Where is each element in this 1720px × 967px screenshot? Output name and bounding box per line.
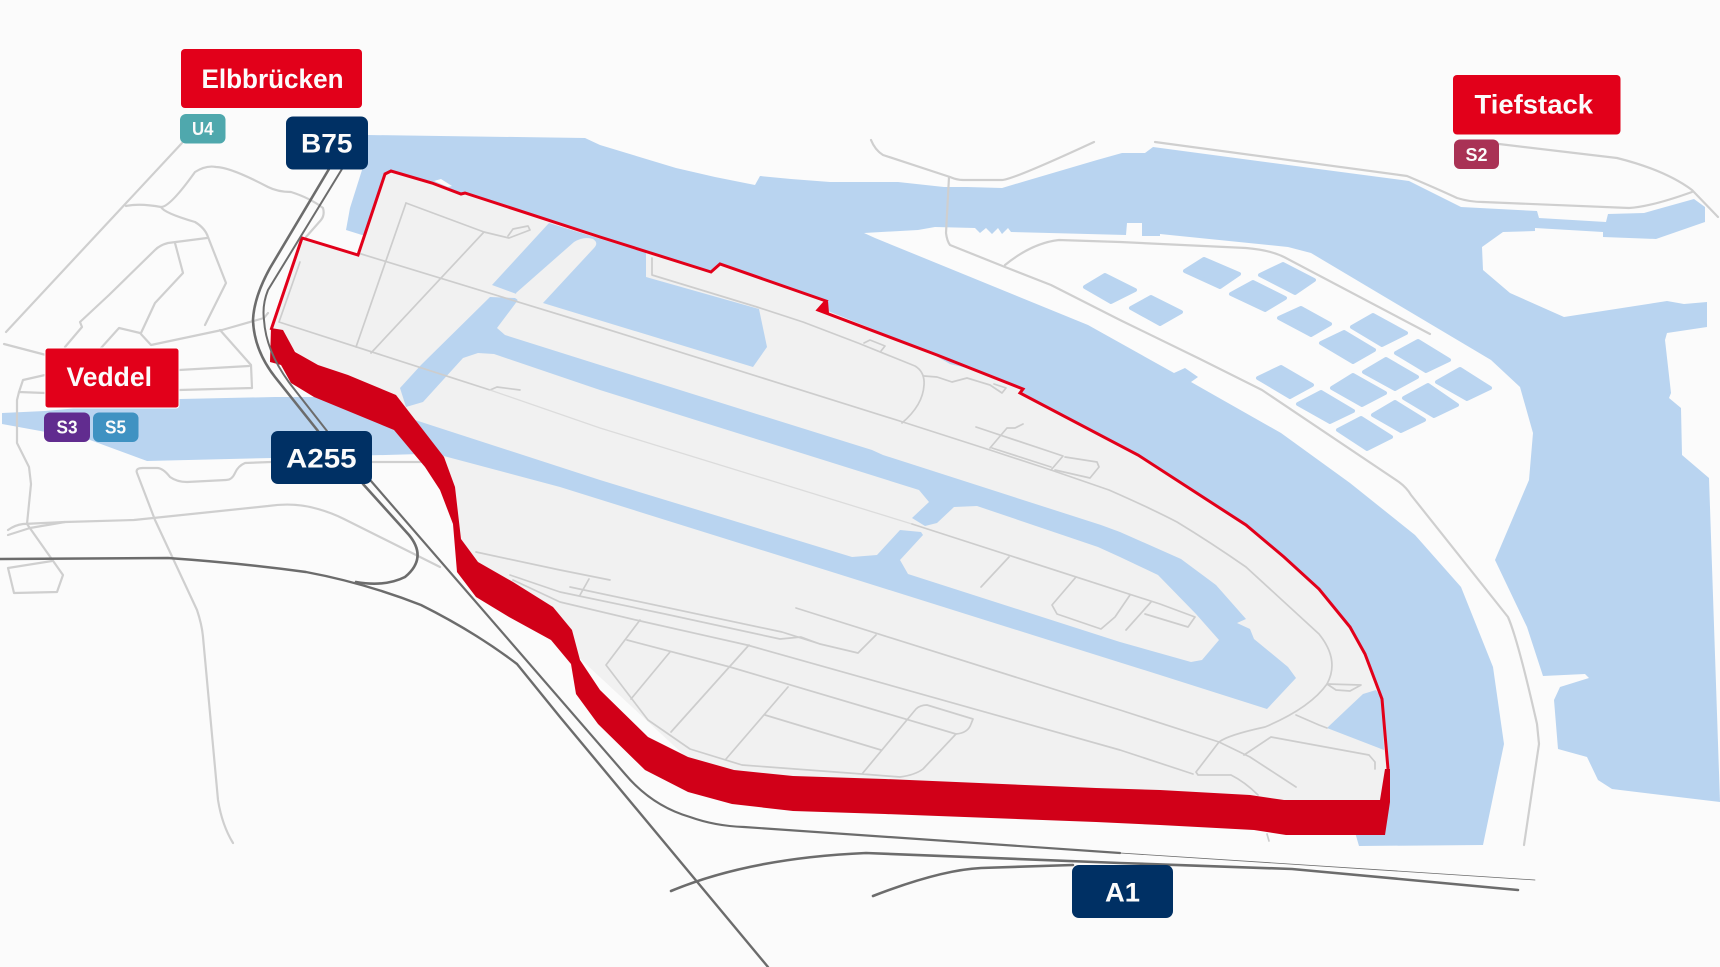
lagoon basins on the Peute peninsula [1085,259,1490,449]
line badge: S2: S2 [1466,145,1488,165]
motorway and federal road lines [0,169,1535,967]
water: river Elbe and east basins [346,135,1720,846]
road badge: B75 [286,116,368,170]
line badge: S5: S5 [105,418,126,438]
water: river wedge at the southern tip [1327,690,1384,750]
water: upper basin inside the district [492,223,767,367]
station label: Tiefstack [1453,75,1620,134]
station label: Veddel [45,348,179,408]
station label: Veddel: Veddel [66,362,152,392]
road badge: A255: A255 [286,444,356,474]
boundary: thin red outline [271,171,1388,769]
pier between the basins [516,238,596,303]
water: Veddel canal [2,397,421,461]
water: sliver along the northern edge [936,356,967,368]
station label: Elbbrücken [181,49,362,108]
roads west of the district [4,143,440,843]
line badge: S3: S3 [56,418,78,438]
line badge: U4: U4 [192,119,214,139]
line badge: U4 [180,114,226,144]
road badge: A255 [271,431,372,484]
road badge: A1 [1072,865,1173,918]
district roads [279,203,1375,841]
station label: Tiefstack: Tiefstack [1474,90,1594,120]
line badge: S5 [93,412,138,442]
project area land [271,171,1388,815]
roads east of the river [871,140,1718,845]
water: canals inside the district [400,297,1296,709]
road badge: A1: A1 [1105,878,1140,908]
line badge: S2 [1454,140,1499,169]
road badge: B75: B75 [301,128,352,158]
boundary: thick red band along the south [270,328,1390,835]
line badge: S3 [44,412,90,442]
station label: Elbbrücken: Elbbrücken [202,64,344,94]
